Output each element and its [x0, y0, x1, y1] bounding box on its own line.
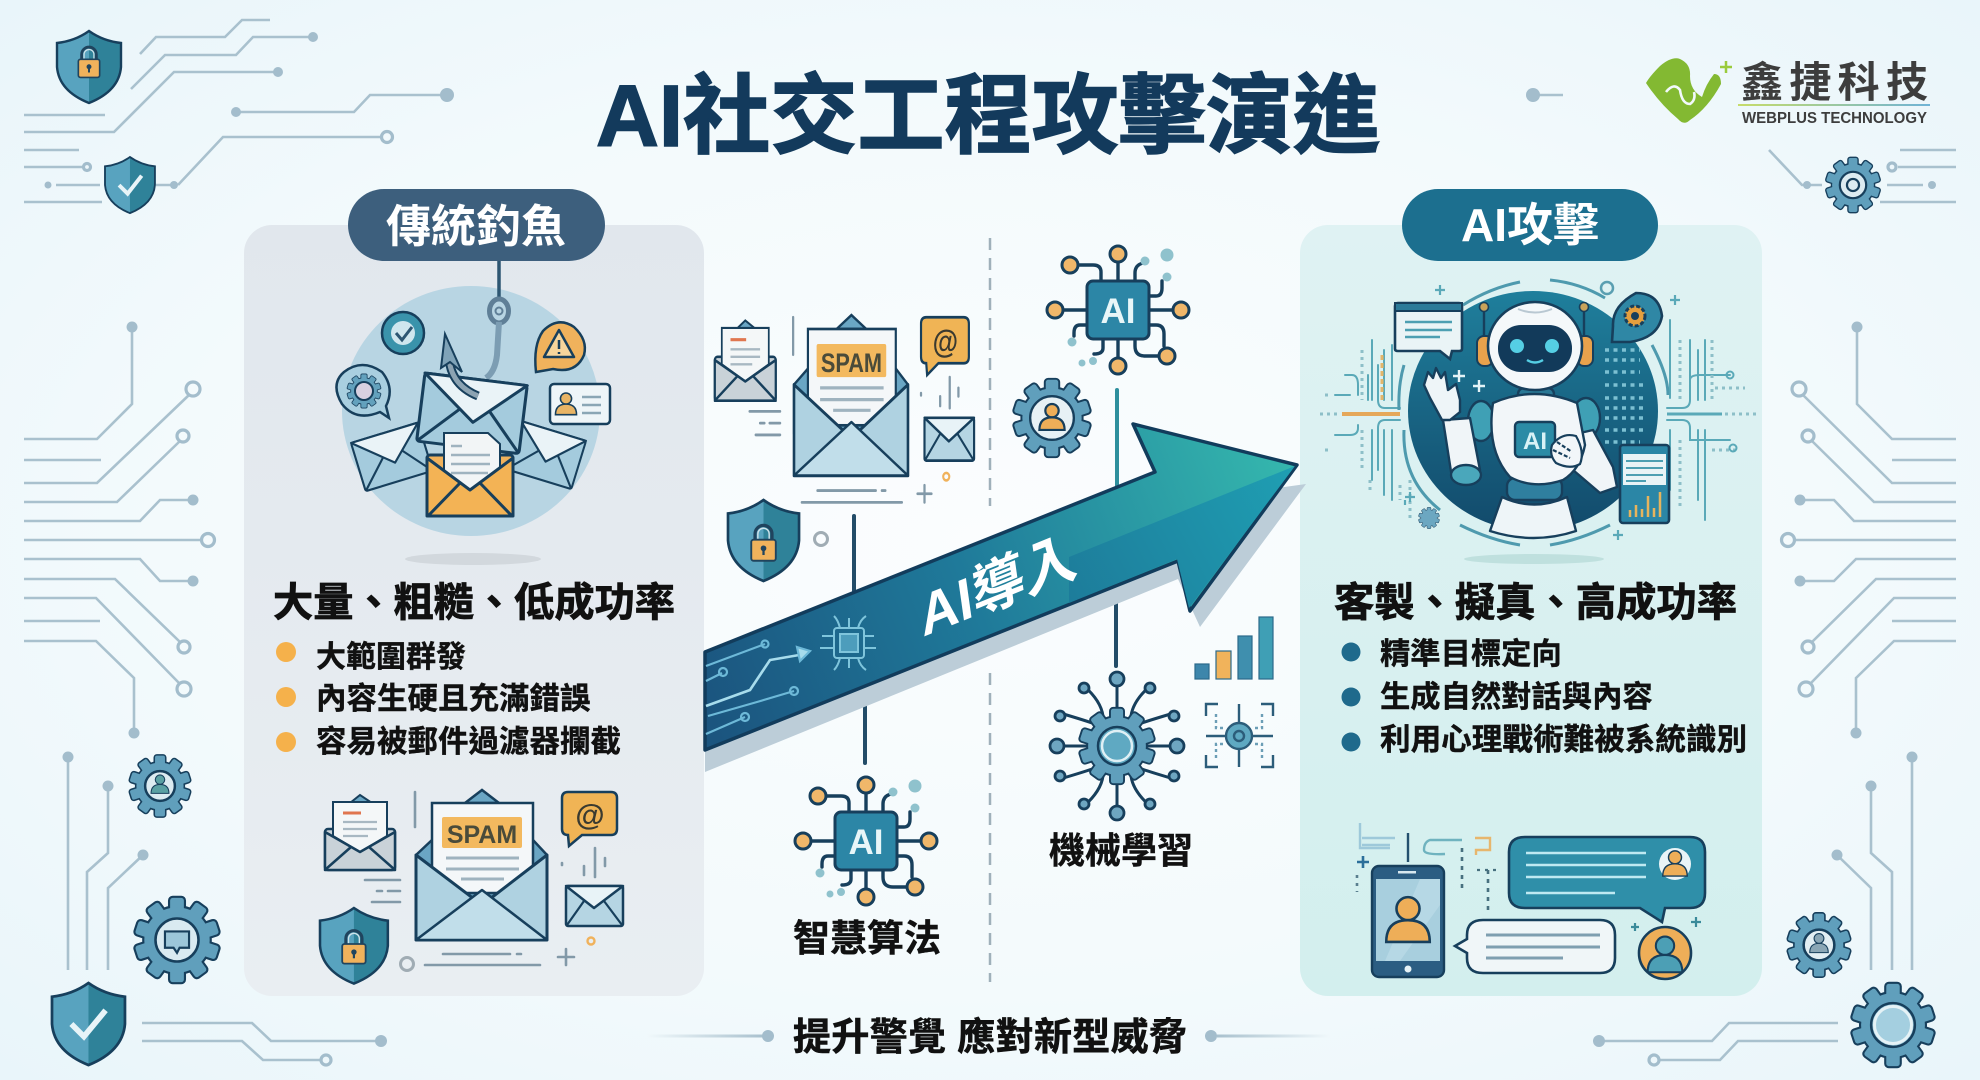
- side envelopes: [351, 421, 586, 491]
- arrow circuit traces: [706, 640, 810, 734]
- icon: person gear right: [1788, 914, 1850, 976]
- heading: right panel summary: 客製、擬真、高成功率: [1334, 581, 1737, 625]
- icon: check shield bottom left: [52, 983, 125, 1065]
- icon: scan target: [1206, 704, 1273, 767]
- robot left arm: [1424, 368, 1481, 485]
- robot right arm: [1573, 430, 1617, 493]
- arrow shadow: [705, 484, 1306, 772]
- icon: lock shield in panel: [320, 908, 388, 984]
- icon: person gear left: [130, 756, 190, 816]
- circuit: middle right: [1782, 322, 1956, 738]
- circuit: bottom right accent: [1205, 1030, 1330, 1042]
- icon: ID card: [550, 384, 610, 424]
- orange envelope with letter: [427, 433, 513, 516]
- at-sign bubble: @: [575, 799, 605, 832]
- decorative connectors: [1357, 823, 1500, 912]
- decorative marks: [750, 317, 958, 502]
- document window: [1620, 445, 1669, 523]
- robot torso: [1491, 394, 1585, 484]
- icon: message gear left: [135, 898, 219, 982]
- bullets: traditional phishing traits: 大範圍群發: [316, 641, 466, 674]
- small closed envelope: [924, 418, 974, 461]
- at-sign bubble: [921, 317, 969, 375]
- bubble: white reply: [1455, 920, 1615, 973]
- circuit: lower right: [1593, 752, 1918, 1065]
- large spam envelope: SPAM: [821, 349, 882, 378]
- robot neck and shoulders: [1468, 388, 1600, 441]
- circuit: bottom left accent: [647, 1030, 774, 1042]
- connector lines behind arrow: [854, 390, 1117, 763]
- icon: AI chip top center: [1047, 246, 1189, 374]
- small teal gear: [1419, 508, 1439, 528]
- heading pill: traditional phishing: [348, 189, 605, 261]
- icon: warning bubble: [535, 322, 585, 372]
- icon: person gear center: [1014, 380, 1090, 456]
- icon: gear bubble: [336, 365, 390, 418]
- antenna and headphones: [1477, 302, 1593, 366]
- arrow lower facet: [1069, 466, 1295, 608]
- icon: barbed hook tip: [441, 334, 478, 396]
- small open envelope: [715, 320, 776, 401]
- icon: gear top right: [1826, 158, 1880, 212]
- side circuitry: [1320, 285, 1758, 540]
- bullets: traditional phishing traits: [276, 641, 621, 759]
- icon: smartphone: [1372, 866, 1444, 977]
- center envelope: [417, 373, 527, 454]
- icon: chip on arrow: [820, 616, 876, 670]
- icon: large gear bottom right: [1852, 984, 1934, 1066]
- icon: check badge: [382, 312, 424, 354]
- arrow body: [705, 424, 1297, 750]
- at-sign bubble: @: [933, 325, 958, 360]
- label: smart algorithms: [793, 777, 941, 959]
- arrow label: AI導入: [916, 524, 1081, 650]
- gear speech bubble: [1612, 293, 1662, 342]
- title: AI社交工程攻擊演進: [596, 68, 1380, 165]
- arrow: AI introduction: [705, 424, 1306, 772]
- small open envelope: [325, 795, 395, 870]
- footer slogan: 提升警覺 應對新型威脅: [793, 1017, 1187, 1059]
- illustration: spam mail cluster (center): [715, 315, 974, 502]
- icon: ring marker in panel: [400, 958, 414, 970]
- circuit: middle left: [24, 322, 214, 738]
- small closed envelope: [566, 886, 623, 926]
- central dashed divider: [989, 238, 991, 982]
- label: machine learning: 機械學習: [1049, 830, 1193, 871]
- heading: left panel summary: 大量、粗糙、低成功率: [273, 581, 675, 625]
- bar chart: rising bars: [1195, 617, 1273, 679]
- chat window: [1395, 303, 1462, 359]
- outer ring arcs: [1399, 280, 1668, 545]
- icon: machine learning gear network: [1050, 672, 1184, 820]
- illustration: AI robot: [1320, 280, 1758, 564]
- sparkles: [1453, 370, 1485, 392]
- bubble: teal message: [1509, 837, 1705, 922]
- illustration: AI conversation: [1357, 823, 1705, 979]
- icon: lock shield center: [728, 500, 799, 581]
- icon: lock shield top left: [57, 31, 121, 103]
- sparkles: [1631, 917, 1701, 931]
- circuit: lower left: [62, 752, 387, 1065]
- icon: AI chip lower: AI: [848, 823, 884, 862]
- bullets: traditional phishing traits: 內容生硬且充滿錯誤: [316, 682, 590, 716]
- icon: fish hook eye: [490, 299, 508, 323]
- icon: user avatar: [1639, 927, 1691, 979]
- large spam envelope: SPAM: [447, 821, 517, 849]
- illustration: spam mail cluster (panel): [325, 790, 623, 965]
- bullets: AI attack traits: [1342, 637, 1747, 757]
- panel: AI attack: [1300, 225, 1762, 996]
- chest badge: AI: [1523, 428, 1547, 455]
- logo: Webplus Technology: WEBPLUS TECHNOLOGY: [1742, 110, 1927, 127]
- at-sign bubble: [562, 792, 617, 846]
- circuit: top left: [24, 20, 454, 202]
- circuit: top right: [1526, 88, 1956, 202]
- label: smart algorithms: 智慧算法: [793, 918, 941, 959]
- icon: check shield top left: [105, 157, 155, 213]
- robot head: [1488, 302, 1582, 390]
- heading pill: traditional phishing: 傳統釣魚: [386, 201, 566, 252]
- illustration: phishing hook with envelopes: [336, 261, 610, 565]
- logo: Webplus Technology: 鑫捷科技: [1741, 59, 1928, 106]
- logo: Webplus Technology: [1646, 58, 1930, 127]
- decorative marks: [365, 792, 605, 965]
- large spam envelope: [794, 315, 908, 476]
- robot lower body: [1490, 478, 1576, 538]
- bullets: AI attack traits: 利用心理戰術難被系統識別: [1380, 723, 1747, 757]
- panel: traditional phishing: [244, 225, 704, 996]
- heading pill: AI attack: AI攻擊: [1461, 199, 1599, 251]
- bullets: AI attack traits: 生成自然對話與內容: [1380, 680, 1653, 714]
- icon: ring marker center: [814, 532, 828, 546]
- bullets: AI attack traits: 精準目標定向: [1380, 637, 1562, 671]
- large spam envelope: [416, 790, 547, 940]
- icon: AI chip lower: [795, 777, 937, 905]
- heading pill: AI attack: [1402, 189, 1658, 261]
- backdrop oval: [1408, 291, 1658, 531]
- robot fist: [1551, 435, 1582, 467]
- icon: AI chip top center: AI: [1100, 292, 1136, 331]
- chest badge: [1515, 422, 1555, 457]
- data matrix dots: [1605, 350, 1645, 442]
- bullets: traditional phishing traits: 容易被郵件過濾器攔截: [316, 725, 621, 759]
